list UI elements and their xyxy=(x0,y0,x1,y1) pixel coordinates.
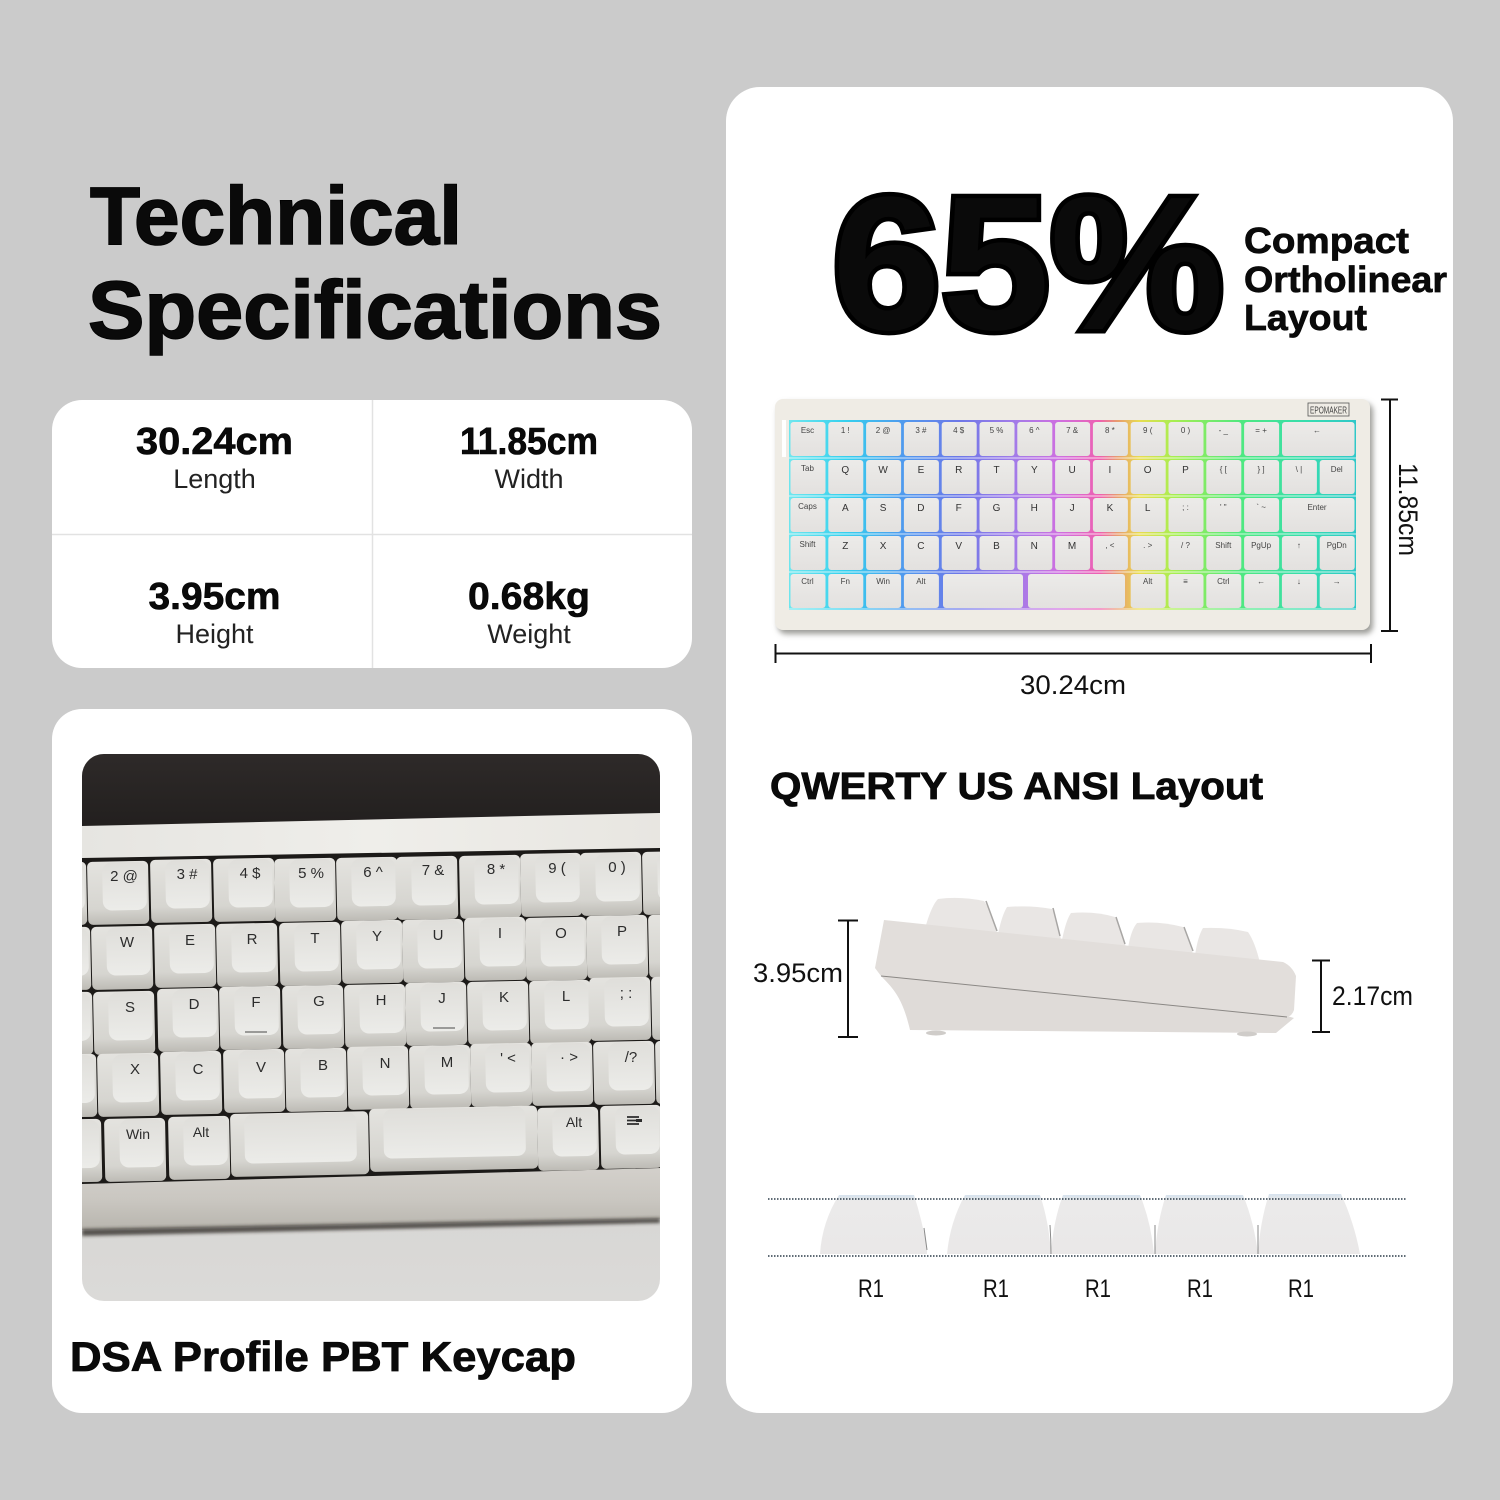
keys: row 4: , < xyxy=(1105,541,1115,550)
keys: row 1: Esc xyxy=(801,426,814,435)
photo key legends: ' < xyxy=(500,1050,516,1067)
photo key legends: /? xyxy=(625,1049,637,1066)
keys: row 1: 5 % xyxy=(990,426,1003,435)
photo key legends: L xyxy=(562,988,570,1005)
photo key legends: F xyxy=(251,994,261,1011)
keys: row 5: Fn xyxy=(841,577,850,586)
keys: row 3: F xyxy=(956,503,962,514)
profile labels: R1 xyxy=(1187,1275,1213,1303)
photo key legends: H xyxy=(376,992,386,1009)
spec: height: 3.95cm xyxy=(148,576,280,618)
keys: row 5: Ctrl xyxy=(1217,577,1230,586)
spec: width: Width xyxy=(494,464,564,494)
photo key legends: 9 ( xyxy=(548,860,566,877)
profile labels: R1 xyxy=(858,1275,884,1303)
keys: row 1: = + xyxy=(1255,426,1267,435)
keycap profile row xyxy=(768,1194,1406,1303)
keys: row 3: A xyxy=(842,503,849,514)
keys: row 1: ← xyxy=(1313,426,1321,435)
keys: row 2: Y xyxy=(1031,465,1038,476)
panel: layout and dimensions xyxy=(726,87,1453,1413)
photo key legends: M xyxy=(441,1054,453,1071)
photo key legends: T xyxy=(310,930,320,947)
dimension: front height 3.95cm: 3.95cm xyxy=(753,958,843,988)
keys: row 2: U xyxy=(1068,465,1076,476)
keys: row 2: T xyxy=(993,465,1000,476)
spec: weight xyxy=(468,576,590,649)
photo key legends: O xyxy=(555,925,567,942)
keys: row 1: 8 * xyxy=(1105,426,1115,435)
photo key legends: · > xyxy=(560,1049,578,1066)
logo: EPOMAKER: EPOMAKER xyxy=(1310,406,1347,416)
spec: length: Length xyxy=(173,464,256,494)
photo key legends: 6 ^ xyxy=(363,864,383,881)
keys: row 5: Alt xyxy=(1143,577,1153,586)
keys: row 5: Ctrl xyxy=(801,577,814,586)
keys: row 2: R xyxy=(955,465,962,476)
panel: dimensions table xyxy=(52,400,692,668)
keys: row 3: Caps xyxy=(798,502,817,511)
text: Compact Ortholinear Layout: Layout xyxy=(1244,297,1367,338)
heading: QWERTY US ANSI Layout: QWERTY US ANSI Layout xyxy=(770,766,1263,808)
keyboard: top view with RGB backlight xyxy=(775,399,1373,634)
photo key legends: 4 $ xyxy=(240,865,261,882)
keys: row 4: . > xyxy=(1143,541,1153,550)
keys: row 1: - _ xyxy=(1219,426,1229,435)
keys: row 2: { [ xyxy=(1220,465,1228,474)
keycap 1 xyxy=(820,1195,927,1254)
keys: row 4: X xyxy=(880,541,887,552)
text: Compact Ortholinear Layout xyxy=(1244,220,1447,338)
photo key legends: Y xyxy=(372,928,382,945)
dimension: keyboard depth 11.85cm xyxy=(1381,400,1423,631)
keys: row 5: ↓ xyxy=(1297,577,1301,586)
keys: row 2: I xyxy=(1109,465,1111,476)
spec: length xyxy=(136,421,293,494)
keys: row 4: ↑ xyxy=(1297,541,1301,550)
photo key legends: N xyxy=(380,1055,390,1072)
keys: row 5: Alt xyxy=(916,577,926,586)
photo key legends: 5 % xyxy=(298,865,324,882)
photo key legends: Alt xyxy=(193,1124,209,1140)
keys: row 3 xyxy=(790,498,1354,532)
profile labels: R1 xyxy=(983,1275,1009,1303)
photo key legends: 0 ) xyxy=(608,859,626,876)
photo key legends: S xyxy=(125,999,135,1016)
keys: row 2: W xyxy=(878,465,888,476)
spec: weight: Weight xyxy=(487,619,571,649)
dimension: keyboard length 30.24cm: 30.24cm xyxy=(1020,670,1126,700)
photo key legends: B xyxy=(318,1057,328,1074)
keys: row 4: C xyxy=(917,541,925,552)
photo key legends xyxy=(110,859,642,1142)
dimension: front height 3.95cm xyxy=(753,920,858,1037)
photo key legends: G xyxy=(313,993,325,1010)
keys: row 5 xyxy=(790,574,1355,608)
title: Technical Specifications: Technical xyxy=(90,171,462,262)
photo key legends: E xyxy=(185,932,195,949)
photo key legends: X xyxy=(130,1061,140,1078)
spec: length: 30.24cm xyxy=(136,421,293,463)
keys: row 3: L xyxy=(1145,503,1151,514)
profile labels xyxy=(858,1275,1314,1303)
photo key legends: I xyxy=(498,925,502,942)
keys: row 2: Del xyxy=(1331,465,1343,474)
keycap 4 xyxy=(1155,1195,1258,1254)
keys: row 5: ← xyxy=(1257,577,1265,586)
keys: row 3: ; : xyxy=(1182,503,1189,512)
keys: row 2: P xyxy=(1182,465,1189,476)
photo key legends: J xyxy=(438,990,446,1007)
keycap 3 xyxy=(1051,1195,1154,1254)
photo key legends: V xyxy=(256,1059,266,1076)
title: Technical Specifications xyxy=(88,171,662,356)
keys: row 4 xyxy=(790,536,1355,570)
photo key legends: D xyxy=(189,996,200,1013)
photo key legends: R xyxy=(247,931,258,948)
keys: row 3: H xyxy=(1031,503,1038,514)
photo key legends: Alt xyxy=(566,1114,582,1130)
keys: row 5: ≡ xyxy=(1183,577,1188,586)
spec: width xyxy=(460,421,598,494)
text: Compact Ortholinear Layout: Ortholinear xyxy=(1244,259,1447,300)
profile labels: R1 xyxy=(1288,1275,1314,1303)
panel: keycap photo xyxy=(25,709,717,1413)
keys: row 4: B xyxy=(993,541,1000,552)
text: Compact Ortholinear Layout: Compact xyxy=(1244,220,1409,261)
photo key legends: U xyxy=(433,927,443,944)
keys: row 2: Q xyxy=(841,465,849,476)
keys: row 4: PgDn xyxy=(1327,541,1347,550)
keys: row 1: 6 ^ xyxy=(1029,426,1040,435)
keys: row 1 xyxy=(790,422,1354,456)
keys: row 2: E xyxy=(918,465,925,476)
keys: row 1: 3 # xyxy=(915,426,927,435)
keys: row 3: K xyxy=(1107,503,1114,514)
keys: row 5: Win xyxy=(876,577,890,586)
photo key legends: 8 * xyxy=(487,861,505,878)
keys: row 2: O xyxy=(1144,465,1152,476)
keys: row 4: / ? xyxy=(1181,541,1190,550)
keys: row 4: Shift xyxy=(1215,541,1232,550)
keys: row 4: Z xyxy=(842,541,848,552)
keys: row 4: M xyxy=(1068,541,1076,552)
photo key legends: 3 # xyxy=(177,866,198,883)
photo keys xyxy=(82,852,660,1182)
photo key legends: K xyxy=(499,989,509,1006)
keys: row 1: 1 ! xyxy=(841,426,850,435)
spec: height: Height xyxy=(175,619,254,649)
keys: row 1: 4 $ xyxy=(953,426,965,435)
keycap 2 xyxy=(947,1195,1051,1254)
spec: weight: 0.68kg xyxy=(468,576,590,618)
keyboard: side profile xyxy=(875,898,1296,1036)
photo key legends: W xyxy=(120,934,135,951)
title: Technical Specifications: Specifications xyxy=(88,265,662,356)
keys: row 3: G xyxy=(993,503,1001,514)
keys: row 2 xyxy=(790,460,1355,494)
photo key legends: C xyxy=(193,1061,204,1078)
keys: row 4: N xyxy=(1031,541,1038,552)
dimension: keyboard depth 11.85cm: 11.85cm xyxy=(1393,463,1423,556)
keys: row 1: 0 ) xyxy=(1181,426,1190,435)
photo key legends: P xyxy=(617,923,627,940)
keys: row 5: → xyxy=(1333,577,1341,586)
keys: row 3: Enter xyxy=(1307,503,1327,512)
photo key legends: 7 & xyxy=(422,862,444,879)
dimension: rear height 2.17cm xyxy=(1312,960,1413,1032)
keys: row 3: D xyxy=(917,503,925,514)
keys: row 3: ' " xyxy=(1220,503,1227,512)
keys: row 4: Shift xyxy=(799,540,816,549)
keys: row 4: V xyxy=(955,541,962,552)
photo key legends: 2 @ xyxy=(110,868,138,885)
keys: row 1: 2 @ xyxy=(876,426,890,435)
dimension: keyboard length 30.24cm xyxy=(776,644,1371,700)
keys: row 3: S xyxy=(880,503,887,514)
profile labels: R1 xyxy=(1085,1275,1111,1303)
logo: EPOMAKER xyxy=(1308,403,1349,416)
keys: row 4: PgUp xyxy=(1251,541,1272,550)
spec: width: 11.85cm xyxy=(460,421,598,463)
keys: row 3: J xyxy=(1070,503,1075,514)
photo: keyboard close-up xyxy=(82,754,660,1301)
photo key legends: ; : xyxy=(620,985,632,1002)
spec: height xyxy=(148,576,280,649)
keys: row 2: } ] xyxy=(1258,465,1265,474)
heading: DSA Profile PBT Keycap: DSA Profile PBT Keycap xyxy=(70,1333,576,1380)
keys: row 1: 9 ( xyxy=(1143,426,1153,435)
headline: 65%: 65% xyxy=(832,158,1224,370)
keys: row 2: Tab xyxy=(801,464,814,473)
photo key legends: Win xyxy=(126,1126,150,1142)
keys: row 3: ` ~ xyxy=(1256,503,1266,512)
keys: row 1: 7 & xyxy=(1066,426,1079,435)
keys: row 2: \ | xyxy=(1296,465,1302,474)
keycap 5 xyxy=(1258,1194,1360,1254)
dimension: rear height 2.17cm: 2.17cm xyxy=(1332,981,1413,1011)
